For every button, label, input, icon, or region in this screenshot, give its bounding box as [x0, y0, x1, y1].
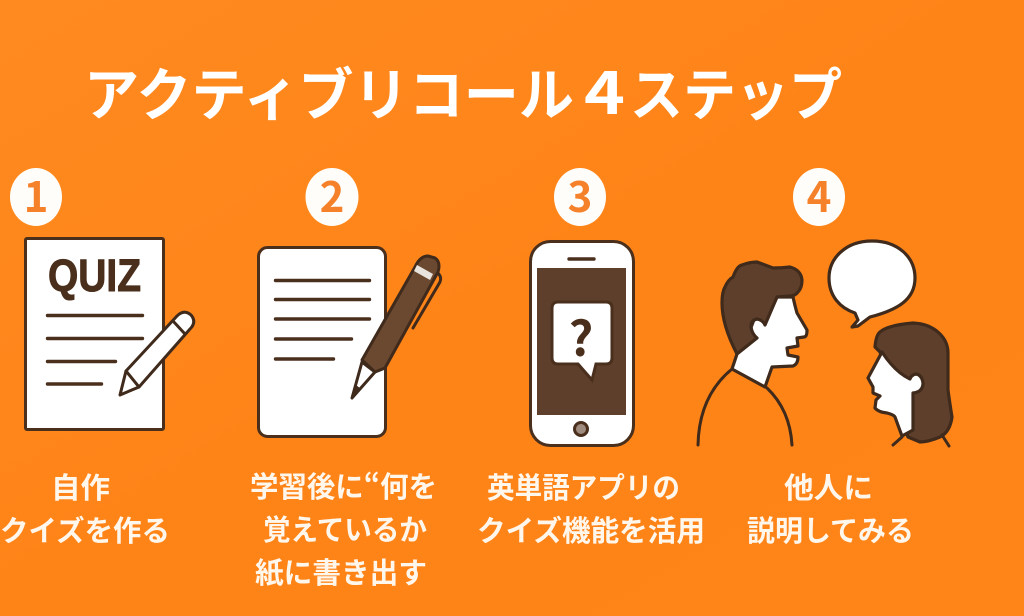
number badge 2: 2 — [320, 164, 344, 225]
step 3 — [477, 164, 705, 550]
label 2: 学習後に“何を — [250, 464, 437, 506]
icon: two people talking — [698, 241, 952, 446]
title: アクティブリコール — [84, 50, 574, 132]
label 2: 覚えているか — [263, 507, 427, 549]
label 3: 英単語アプリの — [487, 465, 680, 507]
icon: smartphone with question bubble: ? — [569, 300, 593, 370]
label 2: 紙に書き出す — [255, 550, 427, 592]
label 4: 他人に — [784, 465, 873, 507]
number badge 3 — [554, 164, 606, 226]
step 2 — [250, 164, 441, 592]
title: ステップ — [630, 50, 842, 132]
number badge 4: 4 — [807, 164, 831, 225]
label 3 — [477, 465, 705, 550]
number badge 4 — [793, 164, 845, 226]
number badge 3: 3 — [568, 164, 592, 225]
title: 4 — [584, 47, 625, 131]
number badge 1 — [10, 164, 62, 226]
label 4 — [747, 465, 914, 550]
label 1 — [0, 465, 170, 550]
icon: quiz sheet with pencil — [26, 238, 194, 430]
number badge 1: 1 — [24, 164, 48, 225]
label 3: クイズ機能を活用 — [477, 508, 705, 550]
label 2 — [250, 464, 437, 592]
title — [84, 47, 842, 132]
label 1: クイズを作る — [0, 508, 170, 550]
number badge 2 — [306, 164, 358, 226]
label 1: 自作 — [51, 465, 110, 507]
label 4: 説明してみる — [747, 508, 914, 550]
icon: paper with pen — [258, 248, 441, 436]
icon: smartphone with question bubble — [530, 242, 634, 446]
step 4 — [698, 164, 952, 550]
icon: quiz sheet with pencil: QUIZ — [48, 250, 141, 301]
step 1 — [0, 164, 194, 550]
